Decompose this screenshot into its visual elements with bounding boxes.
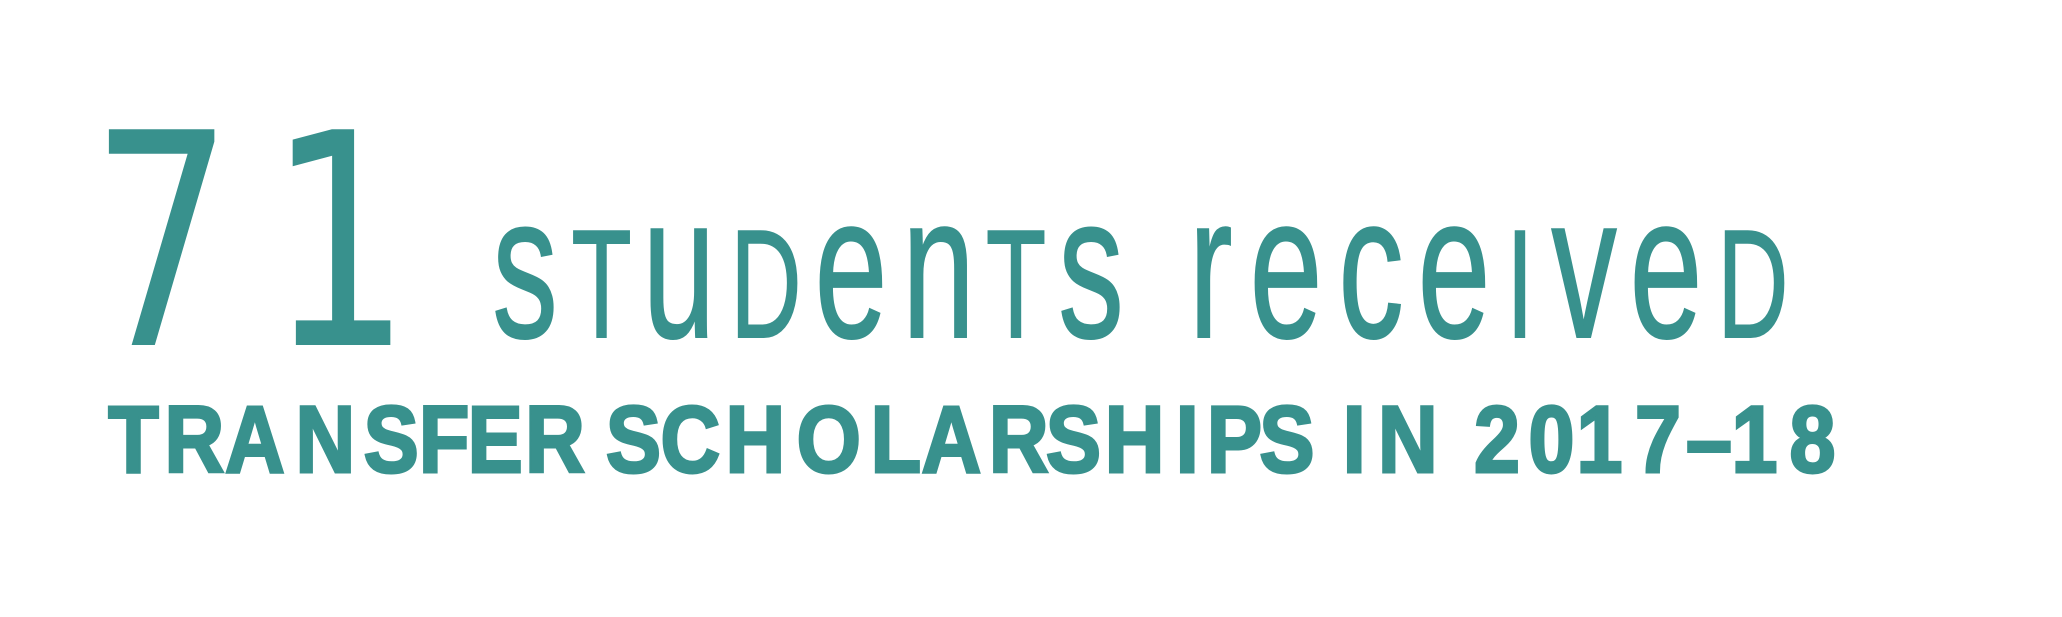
big number: 71: 71 (90, 70, 411, 415)
heading: transfer scholarships in 2017–18: TRANSFER SCHOLARSHIPS IN 2017–18 (108, 386, 1835, 492)
text: students received: students received (492, 139, 1788, 385)
